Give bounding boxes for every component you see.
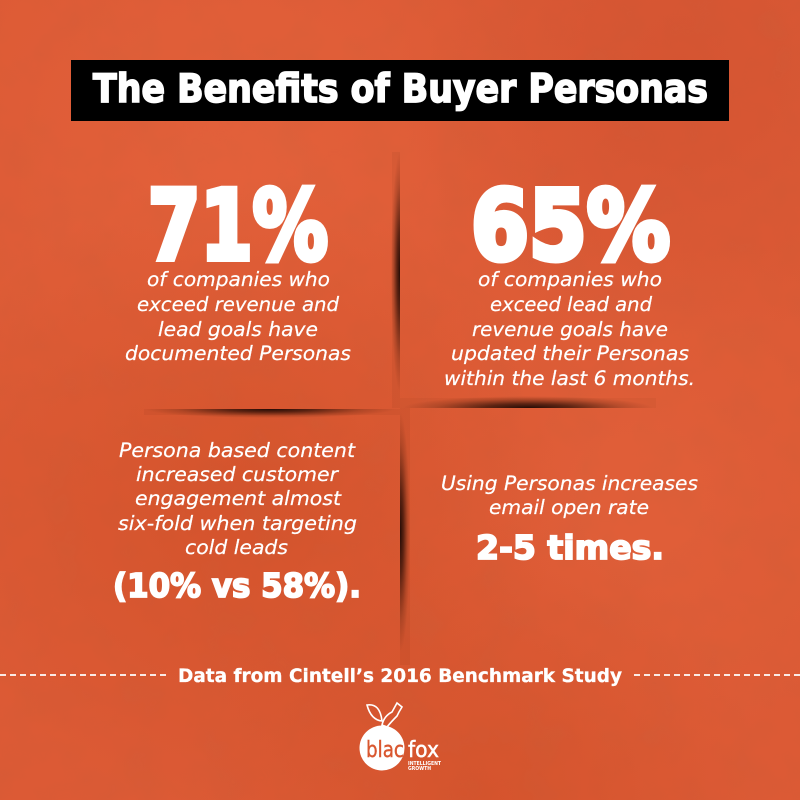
title banner	[71, 60, 729, 121]
title banner: The Benefits of Buyer Personas	[93, 67, 708, 112]
description: 65%: updated their Personas	[451, 342, 689, 365]
panel: 71% stat	[125, 170, 351, 365]
description: 65%: exceed lead and	[490, 293, 653, 316]
description: 65%: of companies who	[478, 268, 662, 291]
logo: blacfox	[360, 703, 442, 772]
stat: 65%: 65%	[471, 170, 670, 282]
stat: 2-5 times: 2-5 times.	[476, 528, 664, 567]
description: 65%: revenue goals have	[472, 318, 668, 341]
description: 71%: documented Personas	[125, 342, 351, 365]
description: engagement: cold leads	[185, 536, 288, 559]
description: engagement: increased customer	[136, 463, 340, 486]
description: 71%	[125, 268, 351, 365]
fold shadows dividing the four panels	[144, 152, 656, 665]
panel: 65% stat	[444, 170, 695, 390]
description: engagement	[118, 439, 357, 559]
description: email open rate: Using Personas increases	[441, 472, 698, 495]
stat: 71%: 71%	[148, 170, 328, 282]
panel: email open rate	[441, 472, 698, 567]
logo: blacfox: blac	[366, 738, 404, 763]
description: engagement: six-fold when targeting	[118, 512, 357, 535]
description: 65%	[444, 268, 695, 390]
source line: Data from Cintell’s 2016 Benchmark Study	[178, 665, 623, 687]
description: engagement: Persona based content	[119, 439, 356, 462]
logo: blacfox: GROWTH	[408, 766, 431, 772]
logo: blacfox: INTELLIGENT	[408, 761, 442, 767]
icon: fruit with leaf	[360, 703, 404, 770]
description: email open rate	[441, 472, 698, 519]
description: engagement: engagement almost	[135, 487, 342, 510]
description: 71%: lead goals have	[158, 318, 318, 341]
description: 71%: exceed revenue and	[137, 293, 340, 316]
logo: blacfox: fox	[408, 738, 439, 763]
panel: customer engagement	[113, 439, 361, 605]
stat: 10% vs 58%: (10% vs 58%).	[113, 566, 361, 605]
description: email open rate: email open rate	[489, 496, 649, 519]
description: 71%: of companies who	[147, 268, 330, 291]
description: 65%: within the last 6 months.	[444, 367, 695, 390]
